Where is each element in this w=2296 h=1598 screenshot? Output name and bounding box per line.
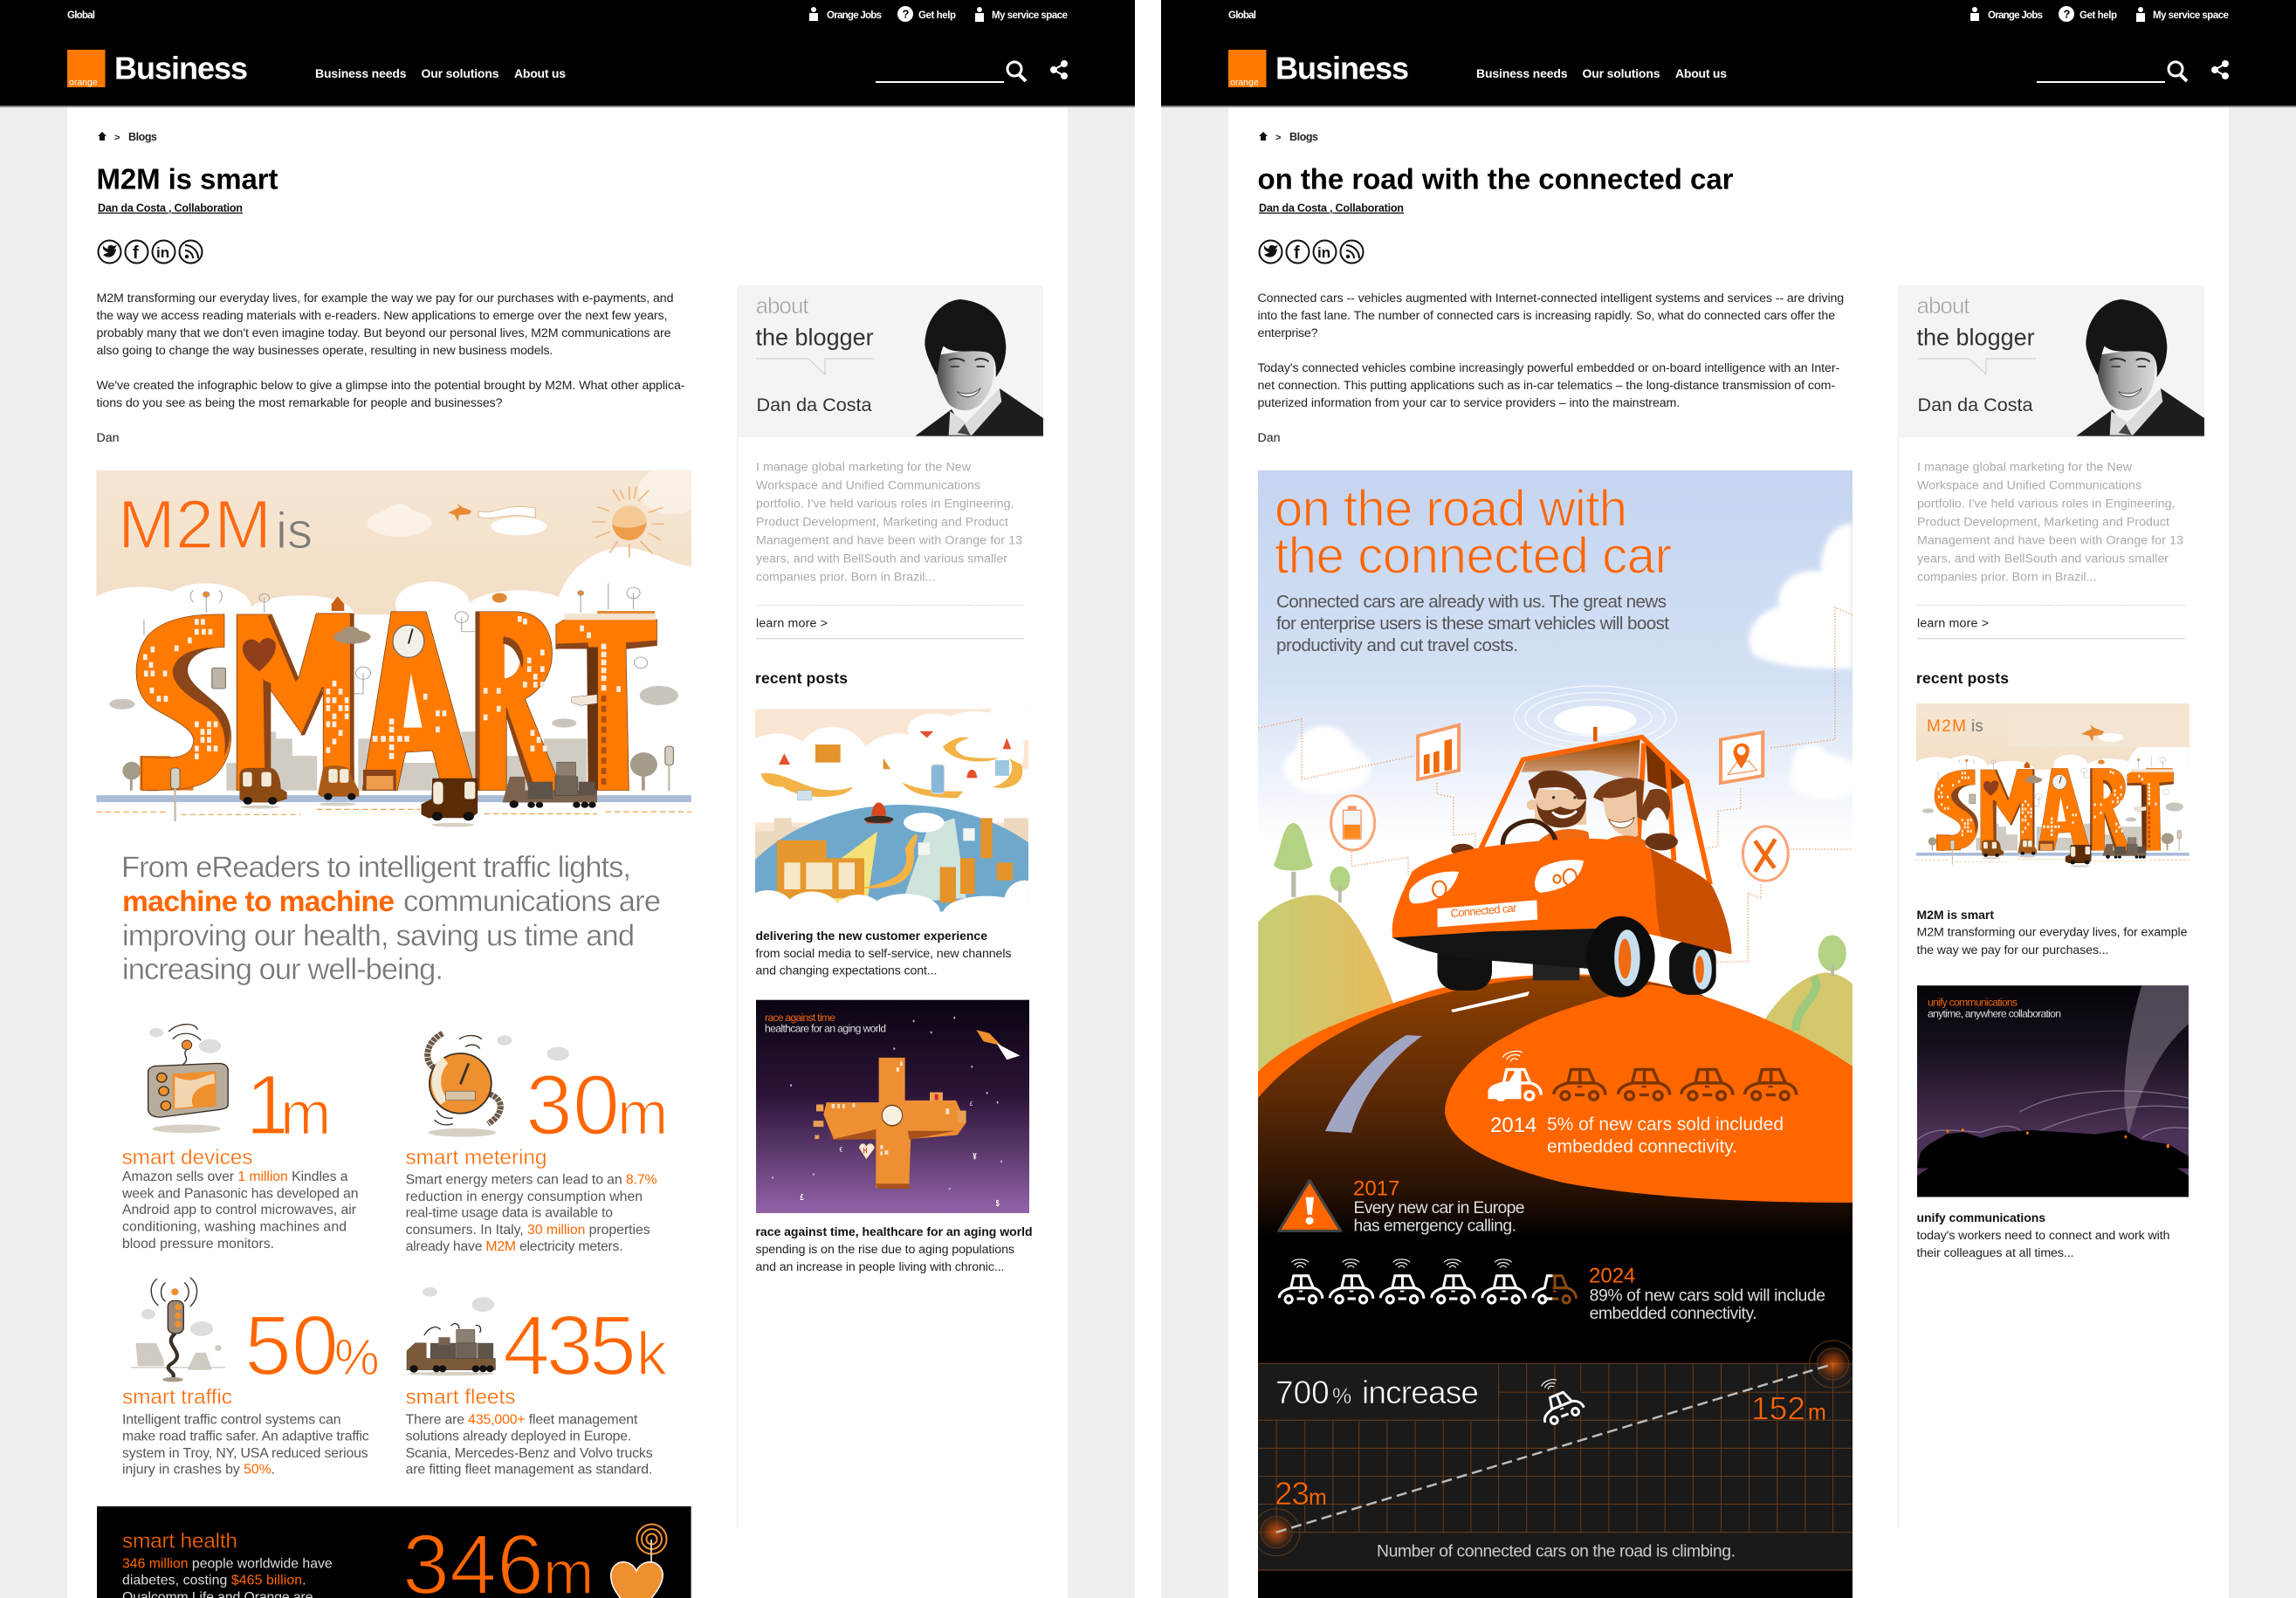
heading: smart metering bbox=[405, 1146, 547, 1169]
number 30m: m bbox=[617, 1079, 668, 1147]
heading: smart fleets bbox=[405, 1386, 515, 1409]
copy: Smart energy meters can lead to an 8.7% bbox=[406, 1172, 657, 1187]
callout: 2017: Every new car in Europe bbox=[1353, 1198, 1524, 1217]
breadcrumb: Blogs bbox=[1289, 131, 1318, 143]
about the blogger card bbox=[737, 285, 1043, 437]
panel: smart health bbox=[96, 1506, 691, 1598]
lede paragraph: machine to machine bbox=[122, 886, 395, 918]
about the blogger card: the blogger bbox=[1917, 325, 2035, 351]
callout: 2024: 89% of new cars sold will include bbox=[1590, 1286, 1825, 1305]
icon: warning triangle bbox=[1279, 1181, 1341, 1231]
copy: real-time usage data is available to bbox=[406, 1206, 613, 1221]
infographic title bbox=[1275, 481, 1672, 585]
about the blogger card: about bbox=[1917, 292, 1970, 319]
bio: portfolio. I've held various roles in Engineering, bbox=[1917, 497, 2176, 511]
right page intro text: Connected cars -- vehicles augmented with Internet-connected intelligent systems and services -- are driving bbox=[1257, 291, 1844, 305]
dotted connector lines bbox=[1258, 607, 1853, 963]
infographic title M2M is: is bbox=[276, 503, 313, 559]
post caption: unify communications: their colleagues at all times... bbox=[1917, 1246, 2074, 1260]
post image: customer experience bbox=[755, 709, 1028, 911]
copy bbox=[406, 1172, 657, 1254]
recent posts heading: recent posts bbox=[755, 669, 848, 687]
chart headline: 700 bbox=[1275, 1375, 1330, 1410]
car row 2024 bbox=[1279, 1259, 1576, 1304]
about the blogger card: Dan da Costa bbox=[756, 394, 873, 415]
number 50% bbox=[244, 1298, 380, 1393]
icon: bar chart tile bbox=[1418, 725, 1459, 779]
post image: race against time: $ bbox=[996, 1198, 1000, 1208]
post image: M2M is smart: M2M bbox=[1927, 717, 1966, 736]
breadcrumb: > bbox=[114, 133, 120, 143]
author line: Dan da Costa , Collaboration bbox=[98, 202, 243, 215]
heading: smart traffic bbox=[122, 1386, 232, 1409]
icon: battery bbox=[1331, 796, 1375, 850]
left page intro text: tions do you see as being the most remarkable for people and businesses? bbox=[96, 396, 503, 410]
copy bbox=[122, 1557, 333, 1598]
post caption: M2M is smart: M2M transforming our everyday lives, for example bbox=[1917, 926, 2188, 940]
post caption: unify communications: unify communications bbox=[1917, 1211, 2045, 1224]
bio: I manage global marketing for the New bbox=[756, 460, 972, 474]
copy: Scania, Mercedes-Benz and Volvo trucks bbox=[406, 1446, 653, 1461]
icon: connected heart bbox=[611, 1524, 667, 1598]
main nav: About us bbox=[1675, 66, 1727, 80]
icon: tools bbox=[1743, 826, 1788, 881]
get help link: Get help bbox=[2079, 10, 2117, 21]
learn more link: learn more > bbox=[756, 616, 828, 630]
main nav: About us bbox=[514, 66, 566, 80]
trend line bbox=[1276, 1364, 1833, 1533]
bio bbox=[756, 460, 1022, 584]
post caption: customer experience: and changing expectations cont... bbox=[756, 964, 938, 978]
bio: companies prior. Born in Brazil... bbox=[1917, 570, 2097, 584]
breadcrumb: > bbox=[1275, 133, 1281, 143]
subhead bbox=[1276, 592, 1669, 655]
wheels bbox=[1438, 937, 1492, 991]
hills and trees bbox=[1258, 822, 1853, 1072]
main nav bbox=[315, 66, 566, 80]
about the blogger card: the blogger bbox=[756, 325, 874, 351]
subhead: for enterprise users is these smart vehicles will boost bbox=[1276, 614, 1669, 634]
number 50%: % bbox=[334, 1329, 380, 1386]
main nav: Our solutions bbox=[421, 66, 499, 80]
copy: system in Troy, NY, USA reduced serious bbox=[122, 1446, 368, 1461]
lede paragraph bbox=[121, 851, 661, 986]
copy: make road traffic safer. An adaptive traffic bbox=[122, 1429, 369, 1444]
panel: right page article head bbox=[1257, 131, 1734, 264]
bio: companies prior. Born in Brazil... bbox=[756, 570, 936, 584]
bio: years, and with BellSouth and various smaller bbox=[756, 552, 1007, 566]
post caption: race against time: and an increase in people living with chronic... bbox=[756, 1260, 1004, 1274]
post image: race against time bbox=[756, 1000, 1029, 1213]
copy bbox=[406, 1412, 653, 1478]
breadcrumb: Blogs bbox=[128, 131, 157, 143]
left page intro text: also going to change the way businesses operate, resulting in new business models. bbox=[96, 344, 553, 358]
icon: get help bbox=[897, 6, 913, 22]
post caption: customer experience bbox=[756, 929, 1011, 978]
lede paragraph: communications are bbox=[403, 885, 661, 918]
icon: service space bbox=[2136, 7, 2145, 22]
post image: unify communications bbox=[1866, 985, 2239, 1393]
title: M2M is smart bbox=[96, 162, 278, 195]
end-point glows bbox=[1253, 1341, 1857, 1556]
callout: 2024 bbox=[1279, 1259, 1825, 1323]
post caption: unify communications bbox=[1917, 1211, 2170, 1260]
number 30m bbox=[526, 1058, 668, 1152]
copy: reduction in energy consumption when bbox=[406, 1190, 643, 1204]
icon: share bbox=[1051, 61, 1067, 79]
signal rings above car bbox=[1514, 686, 1676, 750]
right page intro text: net connection. This putting applications such as in-car telematics – the long-distance transmission of com- bbox=[1257, 379, 1835, 393]
copy: Android app to control microwaves, air bbox=[122, 1203, 356, 1217]
bio: Product Development, Marketing and Product bbox=[1917, 515, 2169, 529]
callout: 2014: 2014 bbox=[1490, 1114, 1536, 1137]
bio: Management and have been with Orange for 13 bbox=[756, 533, 1022, 547]
post caption: race against time: race against time, healthcare for an aging world bbox=[756, 1224, 1032, 1238]
lede paragraph: improving our health, saving us time and bbox=[122, 920, 635, 953]
bio bbox=[1917, 460, 2183, 584]
search field bbox=[876, 62, 1026, 83]
orange logo: orange bbox=[1230, 77, 1259, 87]
icon: service space bbox=[975, 7, 984, 22]
left page intro text: probably many that we don't even imagine today. But beyond our personal lives, M2M communications are bbox=[96, 326, 671, 340]
title: on the road with the connected car bbox=[1257, 162, 1734, 195]
orange jobs link: Orange Jobs bbox=[827, 10, 882, 21]
chart headline bbox=[1275, 1375, 1479, 1410]
car row 2014 bbox=[1488, 1049, 1797, 1100]
left page intro text: Dan bbox=[96, 431, 120, 445]
panel: right page header bbox=[1161, 0, 2296, 107]
driver bbox=[1502, 771, 1591, 847]
number plate bbox=[1438, 900, 1537, 927]
post image: race against time: £ bbox=[801, 1192, 804, 1202]
business wordmark: Business bbox=[114, 51, 248, 86]
copy: Amazon sells over 1 million Kindles a bbox=[122, 1169, 348, 1184]
panel: left page sidebar bbox=[737, 285, 1043, 1527]
infographic title: on the road with bbox=[1275, 481, 1627, 538]
illustration: orange car with driver and passenger bbox=[1392, 727, 1732, 998]
copy bbox=[121, 1169, 358, 1252]
orange jobs link: Orange Jobs bbox=[1988, 10, 2043, 21]
post image: race against time: ¥ bbox=[973, 1151, 977, 1162]
bio: Workspace and Unified Communications bbox=[756, 478, 980, 492]
social icons bbox=[1259, 241, 1364, 264]
social icons: in bbox=[156, 244, 169, 261]
post image: unify communications: anytime, anywhere collaboration bbox=[1928, 1007, 2061, 1019]
bio: portfolio. I've held various roles in Engineering, bbox=[756, 497, 1014, 511]
number 1m: 1 bbox=[245, 1058, 292, 1152]
subhead: productivity and cut travel costs. bbox=[1276, 635, 1518, 655]
copy: solutions already deployed in Europe. bbox=[406, 1429, 631, 1444]
copy: 346 million people worldwide have bbox=[122, 1557, 333, 1572]
infographic: connected car bbox=[1253, 470, 1859, 1598]
search field bbox=[2037, 62, 2187, 83]
post caption: customer experience: from social media to self-service, new channels bbox=[756, 947, 1011, 961]
post caption: unify communications: today's workers need to connect and work with bbox=[1917, 1229, 2170, 1243]
infographic title: the connected car bbox=[1275, 528, 1672, 585]
ground and road bbox=[1258, 974, 1853, 1598]
main nav: Our solutions bbox=[1582, 66, 1660, 80]
sky bbox=[1258, 470, 1853, 812]
right page intro text: puterized information from your car to service providers – into the mainstream. bbox=[1257, 396, 1680, 410]
global label: Global bbox=[67, 10, 95, 21]
icon: get help bbox=[2059, 6, 2074, 22]
copy: injury in crashes by 50%. bbox=[122, 1463, 275, 1478]
copy: diabetes, costing $465 billion. bbox=[122, 1574, 306, 1588]
post image: unify communications: unify communications bbox=[1928, 997, 2018, 1009]
social icons: in bbox=[1317, 244, 1330, 261]
copy bbox=[122, 1412, 369, 1478]
number 1m bbox=[245, 1058, 331, 1152]
icon: car on trend line bbox=[1529, 1371, 1589, 1430]
about the blogger card: about bbox=[756, 292, 809, 319]
left page intro text: the way we access reading materials with e-readers. New applications to emerge over the next few years, bbox=[96, 309, 667, 323]
right page intro text: into the fast lane. The number of connected cars is increasing rapidly. So, what do connected cars offer the bbox=[1257, 309, 1835, 323]
panel: right page sidebar bbox=[1866, 285, 2239, 1527]
post caption: M2M is smart bbox=[1917, 908, 2188, 957]
copy: consumers. In Italy, 30 million properties bbox=[406, 1223, 650, 1238]
infographic title M2M is: M2M bbox=[118, 485, 272, 563]
value 23m bbox=[1275, 1476, 1327, 1512]
stat: smart metering bbox=[405, 1033, 668, 1254]
number 1m: m bbox=[280, 1079, 331, 1147]
icon: get help: ? bbox=[2064, 7, 2071, 21]
copy: week and Panasonic has developed an bbox=[121, 1186, 358, 1201]
social icons: f bbox=[133, 243, 139, 263]
main nav bbox=[1476, 66, 1727, 80]
copy: blood pressure monitors. bbox=[122, 1237, 274, 1252]
passenger bbox=[1593, 778, 1670, 847]
bio: Management and have been with Orange for 13 bbox=[1917, 533, 2183, 547]
get help link: Get help bbox=[918, 10, 956, 21]
post image: race against time: € bbox=[840, 1145, 842, 1154]
heading: smart devices bbox=[122, 1146, 253, 1169]
post image: M2M is smart: is bbox=[1971, 717, 1983, 736]
number 50%: 50 bbox=[244, 1298, 339, 1393]
bio: Product Development, Marketing and Product bbox=[756, 515, 1008, 529]
panel: left page article head bbox=[96, 131, 278, 264]
icon: orange jobs bbox=[809, 7, 818, 21]
value 152m: 152 bbox=[1751, 1390, 1805, 1426]
lede paragraph: From eReaders to intelligent traffic lights, bbox=[121, 851, 631, 884]
panel: left page header bbox=[0, 0, 1135, 107]
service space link: My service space bbox=[2153, 10, 2229, 21]
stat: smart devices bbox=[121, 1025, 358, 1252]
about the blogger card: Dan da Costa bbox=[1917, 394, 2034, 415]
callout: 2014: embedded connectivity. bbox=[1547, 1136, 1737, 1157]
social icons bbox=[98, 241, 203, 264]
business wordmark: Business bbox=[1275, 51, 1409, 86]
car body bbox=[1392, 839, 1732, 954]
right page intro text: enterprise? bbox=[1257, 326, 1318, 340]
headlights bbox=[1409, 871, 1459, 903]
post image: race against time: H bbox=[863, 1146, 868, 1156]
right page intro text bbox=[1257, 291, 1844, 445]
value 23m: 23 bbox=[1275, 1476, 1310, 1512]
icon: orange jobs bbox=[1970, 7, 1979, 21]
right page intro text: Today's connected vehicles combine increasingly powerful embedded or on-board intelligence with an Inter- bbox=[1257, 361, 1839, 375]
callout: 2017: 2017 bbox=[1353, 1177, 1399, 1201]
chart headline: % bbox=[1332, 1384, 1351, 1409]
icon: smart traffic light bbox=[131, 1278, 225, 1382]
subhead: Connected cars are already with us. The great news bbox=[1276, 592, 1667, 612]
chart headline: increase bbox=[1362, 1375, 1479, 1410]
number 435k: 435 bbox=[503, 1298, 636, 1393]
near front wheel bbox=[1586, 916, 1655, 998]
post caption: race against time bbox=[756, 1224, 1032, 1274]
callout: 2017: has emergency calling. bbox=[1353, 1217, 1516, 1236]
left page intro text: M2M transforming our everyday lives, for example the way we pay for our purchases with e-payments, and bbox=[96, 291, 674, 305]
author line: Dan da Costa , Collaboration bbox=[1259, 202, 1404, 215]
breadcrumb bbox=[1259, 131, 1318, 143]
icon: fleet truck bbox=[407, 1287, 495, 1375]
post image: race against time: healthcare for an aging world bbox=[765, 1023, 886, 1035]
bio: years, and with BellSouth and various smaller bbox=[1917, 552, 2169, 566]
post caption: race against time: spending is on the rise due to aging populations bbox=[756, 1243, 1014, 1257]
clouds bbox=[1283, 524, 1859, 799]
stat: smart fleets bbox=[405, 1287, 668, 1478]
callout: 2024: embedded connectivity. bbox=[1590, 1304, 1757, 1323]
icon: share bbox=[2212, 61, 2228, 79]
copy: conditioning, washing machines and bbox=[122, 1220, 347, 1235]
copy: are fitting fleet management as standard. bbox=[406, 1463, 652, 1478]
post image: race against time: £ bbox=[970, 1101, 973, 1108]
callout: 2024: 2024 bbox=[1589, 1264, 1635, 1287]
copy: Intelligent traffic control systems can bbox=[122, 1412, 341, 1427]
icon: map pin tile bbox=[1721, 732, 1763, 783]
copy: There are 435,000+ fleet management bbox=[406, 1412, 638, 1427]
number 30m: 30 bbox=[526, 1058, 620, 1152]
about the blogger card bbox=[1898, 285, 2204, 437]
service space link: My service space bbox=[992, 10, 1068, 21]
post caption: M2M is smart: the way we pay for our purchases... bbox=[1917, 943, 2109, 957]
orange logo bbox=[67, 50, 105, 87]
bio: Workspace and Unified Communications bbox=[1917, 478, 2141, 492]
breadcrumb bbox=[98, 131, 157, 143]
number 435k: k bbox=[636, 1320, 668, 1388]
icon: smart device bbox=[148, 1025, 228, 1133]
chart caption: Number of connected cars on the road is climbing. bbox=[1377, 1541, 1736, 1560]
callout: 2014 bbox=[1488, 1049, 1797, 1157]
post caption: M2M is smart: M2M is smart bbox=[1917, 908, 1994, 922]
recent posts heading: recent posts bbox=[1916, 669, 2009, 687]
copy: already have M2M electricity meters. bbox=[406, 1239, 623, 1254]
bio: I manage global marketing for the New bbox=[1917, 460, 2133, 474]
plate text: Connected car bbox=[1450, 901, 1518, 920]
chart: connected cars growth bbox=[1253, 1341, 1857, 1571]
left page intro text: We've created the infographic below to give a glimpse into the potential brought by M2M. What other applica- bbox=[96, 379, 685, 393]
image text: race against time bbox=[765, 1012, 835, 1024]
post caption: customer experience: delivering the new customer experience bbox=[756, 929, 987, 943]
value 23m: m bbox=[1309, 1485, 1327, 1510]
global label: Global bbox=[1228, 10, 1256, 21]
learn more link: learn more > bbox=[1917, 616, 1989, 630]
callout: 2014: 5% of new cars sold included bbox=[1547, 1114, 1784, 1135]
main nav: Business needs bbox=[1476, 66, 1568, 80]
illustration: SMART city hero bbox=[86, 466, 705, 828]
orange logo bbox=[1228, 50, 1266, 87]
main nav: Business needs bbox=[315, 66, 407, 80]
icon: smart meter bbox=[428, 1033, 569, 1137]
callout: 2017 bbox=[1279, 1177, 1524, 1236]
icon: get help: ? bbox=[903, 7, 910, 21]
post image: M2M is smart bbox=[1912, 702, 2196, 868]
stat: smart traffic bbox=[122, 1278, 380, 1478]
right page intro text: Dan bbox=[1257, 431, 1281, 445]
value 152m: m bbox=[1808, 1400, 1826, 1424]
left page intro text bbox=[96, 291, 685, 445]
social icons: f bbox=[1294, 243, 1300, 263]
heading: smart health bbox=[122, 1529, 237, 1553]
number 346m bbox=[406, 1535, 589, 1594]
orange logo: orange bbox=[69, 77, 98, 87]
lede paragraph: increasing our well-being. bbox=[122, 953, 443, 986]
